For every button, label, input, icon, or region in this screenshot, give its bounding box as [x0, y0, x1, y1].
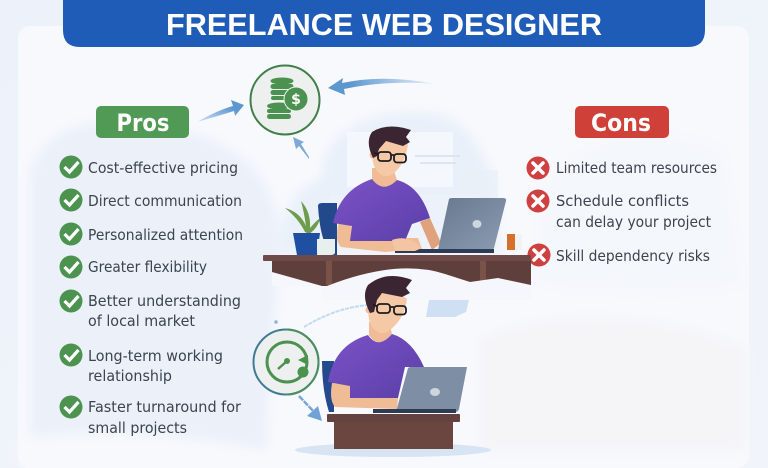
pro: better understanding: of local market — [88, 312, 195, 330]
pro: personalized attention: Personalized attention — [88, 226, 243, 244]
arms — [337, 222, 422, 252]
arrow: speedometer to desk — [299, 396, 322, 421]
pros badge: Pros — [116, 109, 170, 137]
arrow: pros to coins — [197, 100, 244, 122]
face — [372, 135, 408, 176]
laptop — [438, 198, 506, 250]
hand — [392, 238, 422, 251]
pro: direct communication — [60, 188, 242, 212]
pros badge — [96, 106, 189, 138]
hair — [365, 276, 412, 313]
con: limited team resources: Limited team resources — [556, 159, 717, 177]
pro: greater flexibility — [60, 256, 207, 278]
chair — [322, 361, 334, 412]
pro: cost-effective pricing — [60, 156, 238, 178]
pro: greater flexibility: Greater flexibility — [88, 258, 207, 276]
pro: faster turnaround: Faster turnaround for — [88, 398, 242, 416]
shirt — [328, 334, 424, 398]
pro: cost-effective pricing: Cost-effective pricing — [88, 159, 238, 177]
arm — [331, 383, 398, 409]
cons badge — [575, 106, 669, 138]
icon: speedometer — [254, 320, 318, 394]
neck — [369, 322, 392, 342]
title banner — [63, 0, 705, 47]
glasses — [373, 304, 406, 314]
background clouds — [20, 113, 745, 468]
pro: better understanding: Better understanding — [88, 292, 241, 310]
neck — [372, 168, 397, 187]
con: limited team resources — [526, 156, 717, 180]
con: skill dependency — [528, 244, 710, 266]
con: schedule conflicts: Schedule conflicts — [556, 192, 689, 210]
cons list — [526, 156, 717, 266]
cons badge: Cons — [591, 109, 651, 137]
arrow: right to coins — [328, 78, 436, 95]
pro: better understanding — [60, 290, 241, 330]
desk top — [263, 255, 531, 286]
pro: direct communication: Direct communication — [88, 192, 242, 210]
con: schedule conflicts — [526, 190, 711, 231]
chair — [318, 203, 337, 256]
person bottom — [322, 276, 467, 413]
person top — [318, 126, 506, 256]
shirt — [333, 179, 430, 241]
pro: long-term relationship: Long-term working — [88, 347, 223, 365]
cup — [507, 234, 522, 250]
plant and mug — [285, 201, 335, 255]
window background bottom — [304, 300, 469, 327]
laptop — [396, 367, 467, 412]
window background top — [330, 132, 498, 255]
pro: faster turnaround — [60, 396, 242, 437]
con: schedule conflicts: can delay your project — [556, 213, 711, 231]
pro: faster turnaround: small projects — [88, 419, 187, 437]
hair — [369, 126, 411, 158]
desk bottom — [295, 414, 491, 457]
con: skill dependency: Skill dependency risks — [556, 247, 710, 265]
face — [368, 291, 407, 333]
title: FREELANCE WEB DESIGNER — [166, 7, 602, 42]
pro: long-term relationship: relationship — [88, 367, 172, 385]
pros list — [60, 156, 243, 437]
pro: personalized attention — [60, 222, 243, 246]
pro: long-term relationship — [60, 344, 223, 385]
icon: coins: $ — [291, 92, 301, 108]
icon: coins — [250, 66, 320, 134]
glasses — [374, 152, 406, 162]
arrow: up to coins — [293, 137, 309, 159]
cloud divider — [322, 268, 531, 300]
